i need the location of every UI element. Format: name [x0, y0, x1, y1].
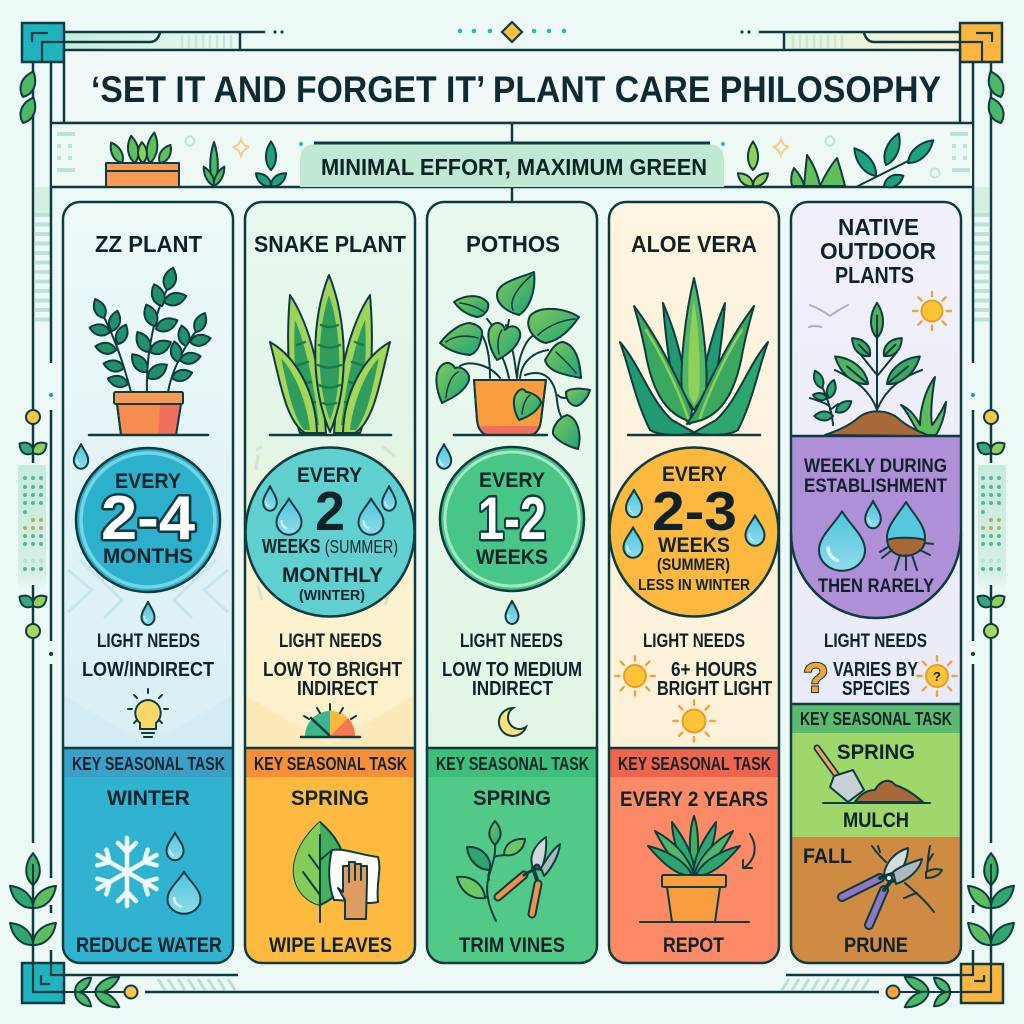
water badge: LESS IN WINTER	[638, 577, 750, 594]
water badge: 2	[315, 480, 345, 542]
seasonal task: TRIM VINES	[459, 934, 565, 957]
light needs: LOW/INDIRECT	[82, 659, 214, 681]
plant name: ZZ PLANT	[95, 231, 202, 257]
title panel	[64, 50, 960, 123]
light needs: LIGHT NEEDS	[643, 631, 745, 652]
light needs: LIGHT NEEDS	[824, 631, 927, 652]
seasonal task	[618, 754, 771, 957]
panel: ZZ Plant	[63, 202, 233, 963]
plant name: SNAKE PLANT	[254, 231, 406, 257]
water badge	[74, 444, 220, 625]
seasonal task: KEY SEASONAL TASK	[618, 754, 771, 774]
plant name: NATIVE	[838, 214, 919, 240]
side hatch and dot columns	[18, 187, 1006, 590]
light needs: VARIES BY	[833, 659, 919, 681]
title: ‘SET IT AND FORGET IT’ PLANT CARE PHILOSOPHY	[91, 69, 941, 110]
ground line	[89, 434, 208, 436]
seasonal task	[800, 709, 952, 957]
top centre ornament	[458, 22, 566, 42]
icon: aloe in pot	[640, 816, 755, 922]
icon: sun and birds	[809, 292, 951, 330]
water badge: EVERY	[115, 470, 181, 493]
water badge	[610, 448, 778, 616]
light needs	[803, 631, 957, 701]
panel: Snake Plant	[245, 202, 415, 963]
light needs: INDIRECT	[297, 678, 378, 700]
water badge: EVERY	[297, 464, 362, 487]
panel: Native Outdoor Plants	[791, 202, 961, 963]
light needs	[442, 631, 582, 700]
water block	[804, 456, 947, 597]
light needs: LOW TO MEDIUM	[442, 659, 582, 681]
ground line	[454, 434, 547, 436]
light needs: LIGHT NEEDS	[460, 631, 563, 652]
seasonal task: KEY SEASONAL TASK	[436, 754, 589, 774]
ground line	[270, 434, 391, 436]
seasonal task	[254, 754, 407, 957]
water block: WEEKLY DURING	[804, 456, 947, 477]
seasonal task: SPRING	[837, 741, 915, 764]
icon: pruning shears and twigs	[842, 846, 942, 925]
light needs: LIGHT NEEDS	[279, 631, 382, 652]
water badge: WEEKS (SUMMER)	[262, 536, 398, 558]
icon: snake plant	[270, 275, 390, 433]
bottom hatch decoration	[158, 979, 869, 990]
corner ornament: top left	[22, 23, 64, 62]
water badge: EVERY	[479, 469, 545, 492]
icon: vines and shears	[457, 821, 560, 921]
seasonal task: PRUNE	[844, 934, 908, 957]
water badge: 1-2	[478, 485, 546, 552]
icon: native plant and soil	[810, 303, 946, 436]
seasonal task: REDUCE WATER	[76, 934, 222, 957]
water badge: MONTHS	[103, 545, 193, 568]
seasonal task: REPOT	[663, 934, 724, 957]
seasonal task: FALL	[803, 845, 852, 868]
water badge: EVERY	[662, 463, 727, 486]
light needs	[82, 631, 214, 681]
plant name: POTHOS	[466, 231, 560, 257]
light needs	[263, 631, 402, 700]
light needs: 6+ HOURS	[671, 659, 757, 681]
seasonal task: WIPE LEAVES	[269, 934, 392, 957]
subtitle pill	[300, 143, 724, 187]
icon: aloe vera	[620, 278, 768, 435]
panel: Pothos	[427, 202, 597, 963]
light needs: LOW TO BRIGHT	[263, 659, 402, 681]
water badge: WEEKS	[658, 534, 730, 557]
plant name: PLANTS	[835, 262, 914, 288]
water block: THEN RARELY	[818, 576, 934, 597]
seasonal task: EVERY 2 YEARS	[620, 788, 768, 811]
corner ornament: bottom right	[961, 964, 1003, 1003]
seasonal task: SPRING	[291, 787, 369, 810]
plant name: OUTDOOR	[820, 238, 936, 264]
light needs: ?	[803, 654, 829, 701]
seasonal task: KEY SEASONAL TASK	[254, 754, 407, 774]
icon: snowflake and drops	[93, 833, 200, 914]
plant name	[820, 214, 936, 288]
icon: light gauge	[301, 704, 360, 737]
water badge	[437, 444, 584, 624]
light needs: ?	[933, 669, 941, 684]
side vine ornaments: right	[964, 69, 1018, 950]
water badge	[246, 448, 414, 616]
band decoration: dots	[57, 132, 970, 172]
band decoration: potted plant	[106, 132, 179, 187]
water block: ESTABLISHMENT	[804, 476, 947, 497]
seasonal task: SPRING	[473, 787, 551, 810]
corner ornament: bottom left	[22, 963, 64, 1003]
water badge: (SUMMER)	[657, 555, 730, 574]
water badge: 2-3	[652, 480, 737, 542]
water badge: 2-4	[101, 484, 196, 553]
bottom sprig: right	[886, 973, 961, 1011]
band decoration: right sprigs	[735, 131, 937, 191]
band decoration: left sprigs	[201, 141, 289, 189]
seasonal task	[436, 754, 589, 957]
water badge: MONTHLY	[282, 564, 383, 587]
corner ornament: top right	[960, 23, 1002, 62]
side vine ornaments: left	[6, 69, 60, 950]
subtitle pill: MINIMAL EFFORT, MAXIMUM GREEN	[321, 154, 707, 180]
subtitle band	[51, 123, 973, 202]
water badge: WEEKS	[476, 546, 548, 569]
icon: light bulb	[128, 689, 168, 737]
seasonal task: MULCH	[843, 809, 909, 832]
light needs: BRIGHT LIGHT	[657, 678, 772, 700]
seasonal task: KEY SEASONAL TASK	[800, 709, 952, 729]
seasonal task: WINTER	[107, 787, 190, 810]
panel: Aloe Vera	[609, 202, 779, 963]
bottom sprig: left	[64, 973, 138, 1011]
light needs: INDIRECT	[472, 678, 553, 700]
ground line	[628, 434, 760, 436]
plant name: ALOE VERA	[631, 231, 757, 257]
light needs: LIGHT NEEDS	[97, 631, 200, 652]
icon: ZZ plant in pot	[88, 266, 212, 435]
light needs	[615, 631, 772, 742]
light needs: SPECIES	[842, 678, 910, 700]
water badge: (WINTER)	[299, 587, 365, 604]
icon: crescent moon	[499, 708, 526, 736]
seasonal task	[72, 754, 225, 957]
band decoration: sparkles	[186, 136, 940, 178]
icon: leaf wiping	[294, 822, 379, 922]
icon: pothos in pot	[436, 272, 590, 449]
seasonal task: KEY SEASONAL TASK	[72, 754, 225, 774]
icon: trowel and mulch	[817, 748, 930, 803]
